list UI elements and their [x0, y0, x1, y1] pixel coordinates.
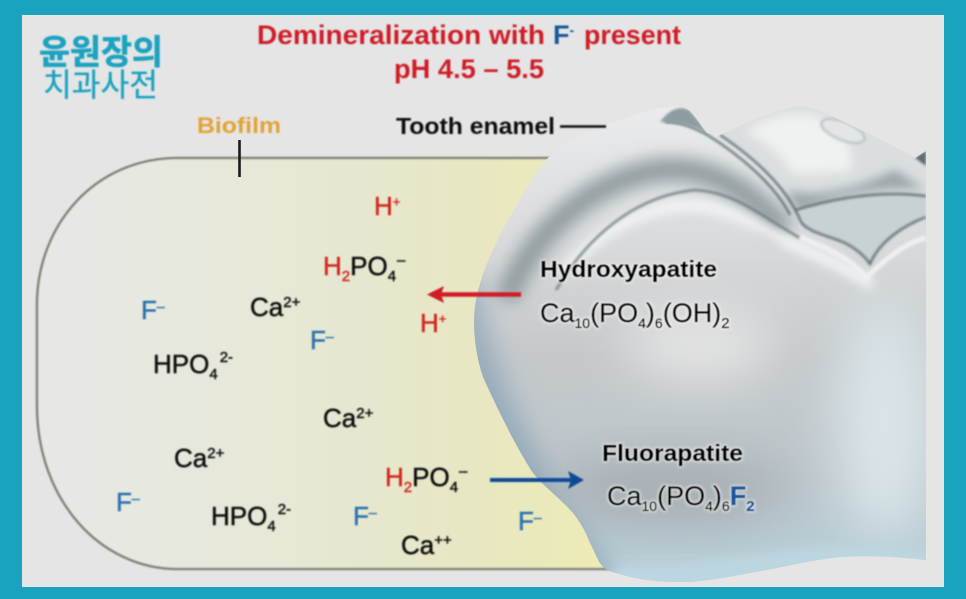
formula: hydroxyapatite: 4 [638, 315, 646, 331]
ion: Ca2+ centre: 2+ [356, 405, 374, 422]
ion: H2PO4- upper: 2 [342, 268, 350, 285]
ion: F- centre: F [310, 325, 326, 355]
formula: hydroxyapatite: Ca [540, 298, 575, 328]
ion: H+ top: H [374, 191, 393, 221]
tooth shading: inner pale ridge [565, 206, 872, 285]
title: present [584, 20, 681, 50]
ion: H2PO4- upper: H [323, 251, 342, 281]
formula: fluorapatite: 2 [746, 498, 755, 515]
arrow: red, out of the tooth [427, 286, 521, 303]
formula: hydroxyapatite: (OH) [663, 298, 721, 328]
formula: fluorapatite: (PO [657, 481, 705, 511]
ion: F- lower left: F [116, 487, 132, 517]
ion: H2PO4- lower: PO [412, 462, 450, 492]
ion: F- left: F [141, 295, 157, 325]
tooth: fissure lines [665, 122, 926, 264]
ion: H+ top: + [393, 194, 400, 209]
ion: F- lower left [116, 487, 140, 517]
ion: H+ near arrow: H [420, 308, 439, 338]
tooth shading: lower-left blue edge [474, 270, 615, 572]
ion: HPO4 2- lower: 2- [278, 501, 291, 518]
ion: F- lower right: – [534, 509, 542, 525]
ion: Ca++ [401, 530, 452, 560]
ion: Ca2+ upper: Ca [250, 292, 283, 322]
ion: F- centre: – [326, 328, 334, 344]
ion: Ca++: Ca [401, 530, 434, 560]
tooth shading: right pale side [835, 300, 935, 540]
ion: H2PO4- upper: PO [350, 251, 388, 281]
formula: fluorapatite: Ca [607, 481, 642, 511]
ion: HPO4 2- upper: 4 [209, 366, 218, 383]
ion: H2PO4- upper: – [397, 252, 406, 269]
title [257, 20, 681, 84]
tooth illustration [474, 106, 926, 582]
ion: F- left: – [157, 298, 165, 314]
tooth shading: back cusp grey valley [786, 170, 926, 212]
label: fluorapatite: Fluorapatite [602, 440, 743, 466]
ion: HPO4 2- lower [211, 501, 291, 535]
ion: HPO4 2- upper: 2- [220, 349, 233, 366]
arrow: blue, into the tooth [490, 471, 584, 489]
ion: H2PO4- lower: – [459, 463, 468, 480]
formula: fluorapatite: F [730, 481, 746, 511]
ion: H2PO4- upper [323, 251, 406, 285]
tooth: cusp tip shade [660, 108, 708, 134]
ion: F- lower centre [353, 501, 377, 531]
logo: dental dictionary wordmark: 치과사전 [43, 67, 158, 103]
ion: F- lower right: F [518, 506, 534, 536]
tooth: back cusp [722, 106, 918, 164]
tooth: dark right notch [915, 150, 926, 166]
tooth shading: back cusp bright face [745, 114, 851, 174]
tooth shading: grey band below the outer rim [506, 169, 785, 300]
ion: H2PO4- lower: H [385, 462, 404, 492]
label: hydroxyapatite: Hydroxyapatite [540, 256, 717, 282]
ion: Ca2+ upper [250, 292, 301, 322]
formula: fluorapatite: 4 [705, 498, 713, 514]
tooth shading: groove line [556, 190, 800, 290]
tooth: cusp dimple [819, 117, 866, 145]
formula: fluorapatite: 6 [722, 498, 730, 514]
formula: fluorapatite: ) [713, 481, 722, 511]
ion: H+ near arrow: + [439, 311, 446, 326]
formula: hydroxyapatite: ) [646, 298, 655, 328]
ion: HPO4 2- upper [153, 349, 233, 383]
tooth: pale line under fissure [800, 237, 926, 278]
ion: Ca2+ upper: 2+ [283, 294, 301, 311]
biofilm label: Biofilm [197, 113, 281, 138]
logo: dental dictionary wordmark [39, 34, 163, 103]
ion: HPO4 2- lower: 4 [267, 518, 276, 535]
ion: HPO4 2- lower: HPO [211, 501, 267, 531]
ion: F- centre [310, 325, 334, 355]
formula: hydroxyapatite [540, 298, 730, 332]
biofilm leader line [238, 140, 241, 177]
ion: Ca2+ lower left [174, 443, 225, 473]
logo: dental dictionary wordmark: 윤원장의 [39, 34, 163, 72]
ion: F- lower centre: F [353, 501, 369, 531]
tooth enamel label with leader line: Tooth enamel [396, 113, 555, 139]
biofilm region [37, 158, 640, 569]
ion: HPO4 2- upper: HPO [153, 349, 209, 379]
formula: hydroxyapatite: 10 [575, 315, 590, 331]
tooth shading: bottom blue lip [614, 548, 924, 582]
ion: Ca2+ lower left: 2+ [207, 445, 225, 462]
ion: F- lower right [518, 506, 542, 536]
ion: H2PO4- upper: 4 [388, 268, 396, 285]
ion: H2PO4- lower [385, 462, 468, 496]
formula: hydroxyapatite: (PO [590, 298, 638, 328]
formula: fluorapatite: 10 [642, 498, 657, 514]
ion: Ca2+ lower left: Ca [174, 443, 207, 473]
ion: Ca++: ++ [434, 532, 452, 549]
ion: F- left [141, 295, 165, 325]
tooth shading: central highlight [625, 311, 775, 379]
title: F [553, 20, 570, 50]
ion: F- lower left: – [132, 490, 140, 506]
tooth shading: lower darker patch [550, 458, 790, 522]
ion: H2PO4- lower: 4 [450, 479, 458, 496]
formula: hydroxyapatite: 2 [721, 315, 730, 332]
ion: Ca2+ centre [323, 403, 374, 433]
ion: H2PO4- lower: 2 [404, 479, 412, 496]
formula: fluorapatite [607, 481, 755, 515]
title: - [570, 22, 574, 38]
tooth: lower cusp facet [796, 194, 926, 262]
title: pH 4.5 – 5.5 [394, 54, 544, 84]
ion: Ca2+ centre: Ca [323, 403, 356, 433]
ion: F- lower centre: – [369, 504, 377, 520]
formula: hydroxyapatite: 6 [655, 315, 663, 331]
title: Demineralization with [257, 20, 545, 50]
